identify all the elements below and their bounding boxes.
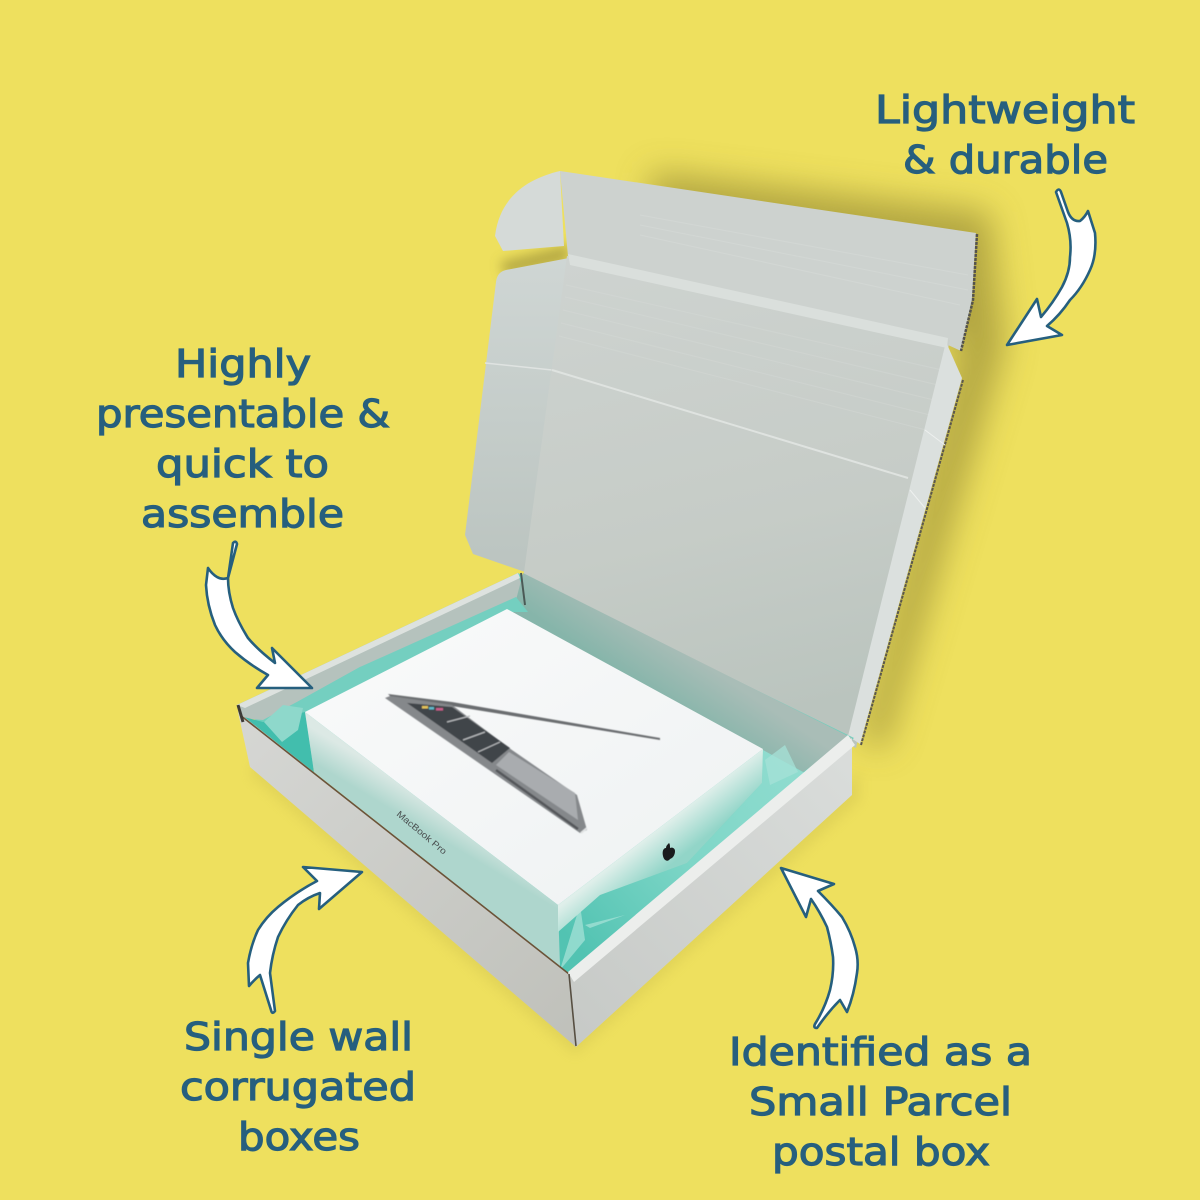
arrow: lightweight and durable <box>1007 190 1095 345</box>
label: lightweight and durable: & durable <box>903 138 1108 182</box>
label: highly presentable: assemble <box>141 492 344 536</box>
product box right side <box>558 749 763 932</box>
hinge corner <box>521 573 525 605</box>
ground shadow under box <box>250 760 860 1055</box>
lid fold ridge <box>568 254 948 348</box>
laptop lower edge <box>496 770 578 829</box>
left flap crease <box>485 363 552 370</box>
label: highly presentable: Highly <box>175 342 311 386</box>
touch bar colours <box>422 706 443 710</box>
product box top <box>305 609 763 905</box>
tissue: right of product box <box>558 750 812 978</box>
arrow: single wall <box>248 867 362 1013</box>
arrow: small parcel <box>781 868 858 1028</box>
label: single wall: boxes <box>238 1115 360 1159</box>
tissue: lower left fold <box>240 712 571 975</box>
inner lid panel <box>523 256 950 748</box>
label: small parcel: Small Parcel <box>749 1080 1012 1124</box>
label: single wall: corrugated <box>180 1065 416 1109</box>
teal tissue paper <box>240 597 812 978</box>
right flap creases <box>910 430 945 508</box>
tissue: upper left band <box>263 597 528 720</box>
laptop trackpad <box>496 752 578 820</box>
interior floor <box>237 573 854 978</box>
laptop picture <box>385 694 660 833</box>
label: small parcel: Identified as a <box>729 1030 1032 1074</box>
label: single wall <box>180 1015 416 1159</box>
left lid flap <box>465 258 569 572</box>
interior left wall rim <box>237 573 520 708</box>
box right front panel <box>568 738 852 1047</box>
interior back wall <box>507 573 852 772</box>
laptop edge highlight <box>581 828 587 833</box>
label: lightweight and durable: Lightweight <box>875 88 1135 132</box>
label: lightweight and durable <box>875 88 1135 182</box>
keyboard keys <box>447 716 500 752</box>
product box left side <box>305 712 560 967</box>
label: highly presentable: quick to <box>156 442 329 486</box>
lid horizontal crease <box>552 370 908 478</box>
tissue: pale crumple <box>264 705 303 742</box>
label: highly presentable <box>96 342 390 536</box>
arrow: highly presentable <box>206 542 312 688</box>
label: single wall: Single wall <box>184 1015 413 1059</box>
laptop base <box>385 696 587 833</box>
tissue: crumple lines <box>560 745 798 970</box>
right flap corrugated edge <box>861 380 963 745</box>
label: highly presentable: presentable & <box>96 392 390 436</box>
label: small parcel <box>729 1030 1032 1174</box>
box right rim <box>568 735 855 982</box>
corner tab of lid <box>495 171 564 251</box>
right lid flap <box>848 342 962 744</box>
box corner seam <box>569 974 576 1046</box>
laptop screen edge <box>388 694 660 740</box>
postal box illustration <box>237 171 977 1047</box>
box left front panel <box>238 712 576 1047</box>
interior left wall <box>237 573 528 720</box>
box back corner <box>238 705 243 722</box>
top tuck flap of lid <box>560 171 977 351</box>
lid corrugation lines <box>559 285 942 430</box>
apple logo <box>663 843 675 861</box>
lid drop shadow <box>500 172 1005 750</box>
MacBook Pro label: MacBook Pro <box>395 809 449 856</box>
label: small parcel: postal box <box>772 1130 990 1174</box>
box left front dark seam <box>240 715 569 974</box>
laptop keyboard <box>407 703 510 763</box>
